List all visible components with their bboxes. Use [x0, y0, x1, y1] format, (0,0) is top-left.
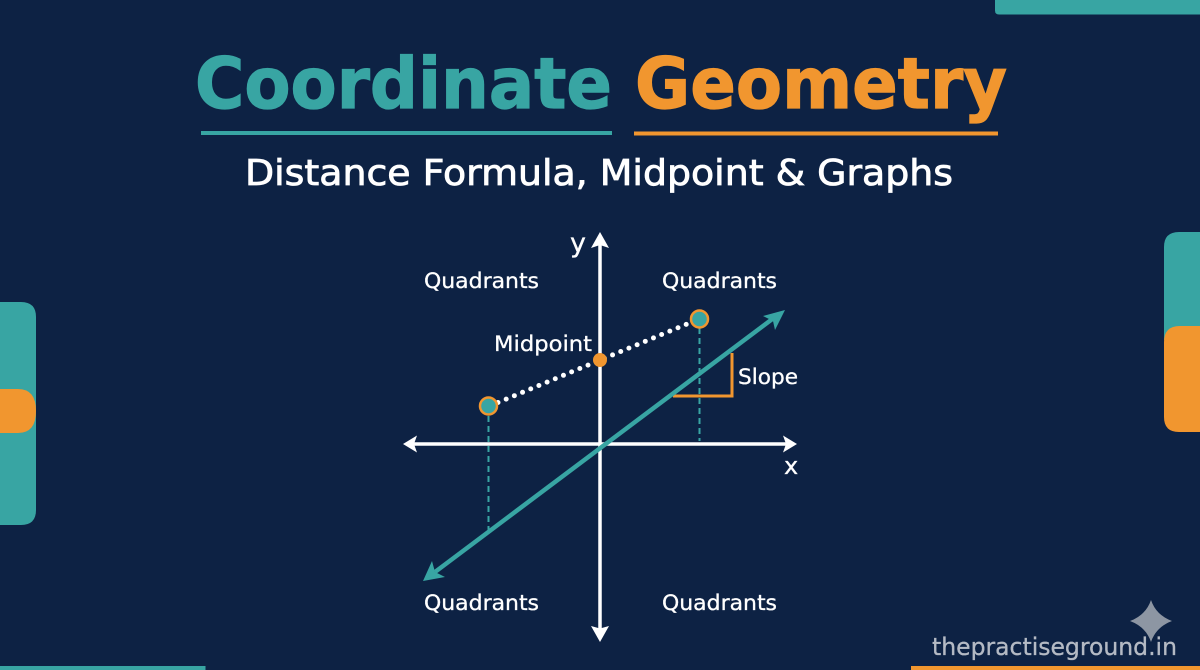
teal line with arrows	[423, 310, 785, 581]
dashed guide: right point	[698, 328, 700, 441]
midpoint marker	[593, 353, 607, 367]
title: Geometry	[635, 43, 1007, 125]
midpoint label: Midpoint	[494, 332, 592, 356]
x axis	[403, 436, 797, 452]
left point	[480, 398, 497, 414]
top right accent bar	[995, 0, 1200, 14]
y axis label: y	[570, 228, 586, 259]
title underline: geometry	[634, 132, 998, 136]
dashed guide: left point	[488, 416, 490, 530]
y axis	[591, 232, 609, 642]
quadrant label: top left: Quadrants	[424, 269, 539, 293]
right point	[691, 310, 708, 328]
icon: sparkle watermark	[1130, 600, 1172, 642]
title underline: coordinate	[201, 131, 612, 135]
title	[195, 43, 1007, 125]
bottom right accent bar	[911, 666, 1200, 670]
website watermark: thepractiseground.in	[932, 633, 1177, 661]
x axis label: x	[784, 452, 798, 480]
dotted segment	[498, 324, 687, 402]
coordinate graph	[403, 228, 798, 642]
title: Coordinate	[195, 43, 612, 125]
slope label: Slope	[738, 365, 798, 389]
slope triangle	[673, 353, 732, 396]
quadrant label: bottom left: Quadrants	[424, 591, 539, 615]
quadrant label: top right: Quadrants	[662, 269, 777, 293]
bottom left accent bar	[0, 666, 206, 670]
right side tab	[1164, 232, 1200, 432]
quadrant label: bottom right: Quadrants	[662, 591, 777, 615]
left side tab	[0, 302, 36, 525]
subtitle: Distance Formula, Midpoint & Graphs	[245, 153, 953, 194]
